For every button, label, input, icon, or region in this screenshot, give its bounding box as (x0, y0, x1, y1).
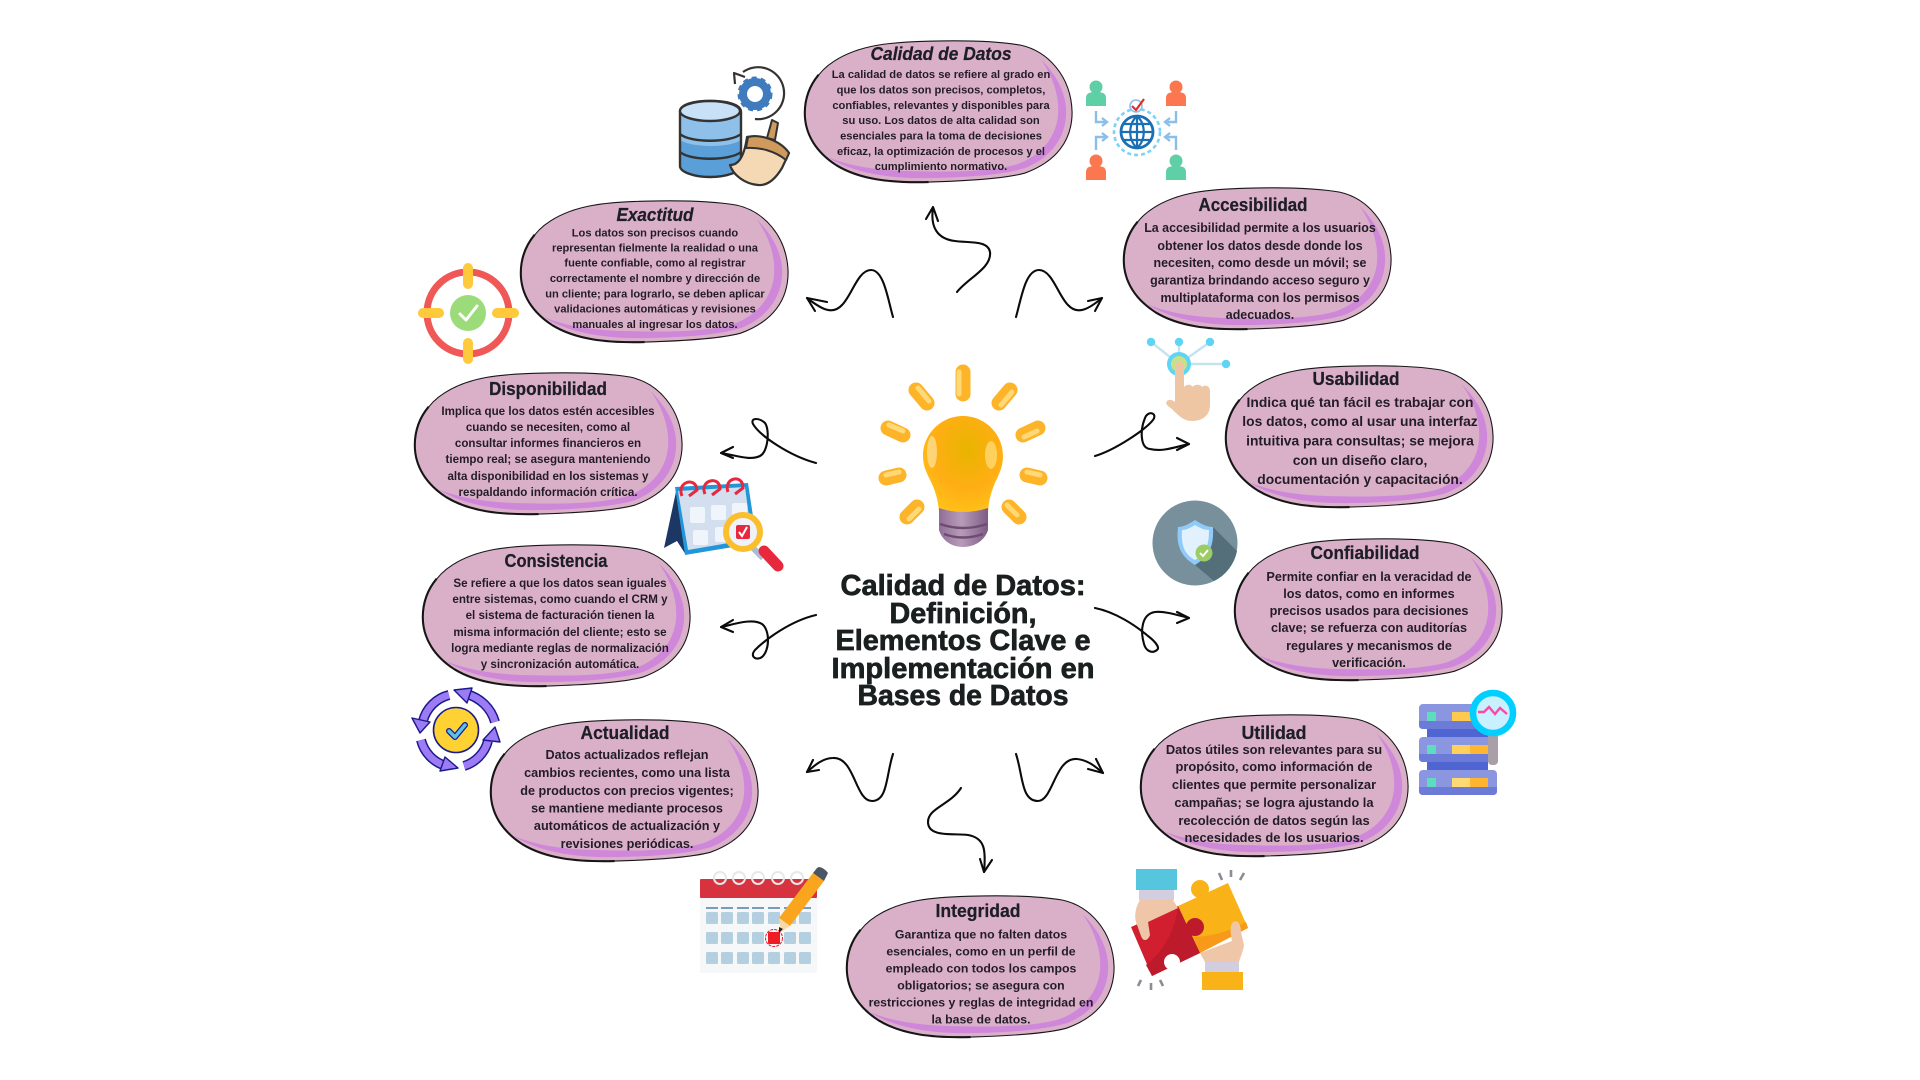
body: Usabilidad: con un diseño claro, (1293, 452, 1427, 468)
body: Exactitud: fuente confiable, como al registrar (564, 257, 746, 269)
body: Utilidad: necesidades de los usuarios. (1184, 830, 1364, 845)
body: Accesibilidad: garantiza brindando acceso seguro y (1150, 273, 1370, 287)
icon: security shield (1152, 500, 1238, 586)
arrow: to Actualidad (807, 754, 893, 801)
body: Calidad de Datos: esenciales para la toma de decisiones (840, 130, 1042, 142)
heading: Usabilidad: Usabilidad (1312, 369, 1400, 389)
body: Disponibilidad: alta disponibilidad en los sistemas y (447, 470, 649, 483)
bubble: Confiabilidad (1235, 539, 1502, 680)
body: Confiabilidad: Permite confiar en la veracidad de (1266, 570, 1472, 584)
bubble: Calidad de Datos (805, 41, 1072, 182)
body: Calidad de Datos: confiables, relevantes y disponibles para (832, 100, 1050, 112)
body: Calidad de Datos: que los datos son precisos, completos, (837, 84, 1045, 96)
title (832, 570, 1094, 712)
body: Confiabilidad: regulares y mecanismos de (1286, 639, 1452, 653)
title: Elementos Clave e (836, 625, 1090, 657)
body: Exactitud: manuales al ingresar los datos. (572, 319, 738, 331)
icon: database and brush (680, 67, 789, 185)
heading: Consistencia: Consistencia (504, 551, 608, 571)
bubble: Utilidad (1141, 715, 1408, 856)
body: Actualidad: revisiones periódicas. (561, 837, 693, 851)
body: Usabilidad: Indica qué tan fácil es trabajar con (1247, 394, 1473, 410)
body: Disponibilidad: Implica que los datos estén accesibles (441, 405, 655, 418)
bubble: Usabilidad (1226, 366, 1493, 507)
body: Consistencia: el sistema de facturación tienen la (466, 609, 655, 622)
body: Integridad: la base de datos. (931, 1012, 1031, 1026)
body: Consistencia: logra mediante reglas de normalización (451, 642, 669, 655)
body: Confiabilidad: clave; se refuerza con auditorías (1271, 621, 1467, 635)
body: Confiabilidad: los datos, como en informes (1283, 587, 1455, 601)
icon: globe with users (1086, 80, 1186, 180)
arrow: to Integridad (928, 788, 992, 872)
body: Disponibilidad: cuando se necesiten, como al (466, 421, 630, 434)
body: Confiabilidad: verificación. (1332, 656, 1406, 670)
title: Implementación en (832, 653, 1094, 685)
body: Calidad de Datos: eficaz, la optimización de procesos y el (837, 146, 1045, 158)
title: Calidad de Datos: (840, 570, 1086, 602)
arrow: to Confiabilidad (1095, 608, 1189, 652)
bubble: Disponibilidad (415, 373, 682, 514)
body: Utilidad: propósito, como información de (1176, 759, 1372, 774)
body: Integridad: restricciones y reglas de integridad en (869, 995, 1093, 1009)
body: Actualidad: de productos con precios vigentes; (520, 784, 734, 798)
body: Integridad: obligatorios; se asegura con (897, 978, 1065, 992)
icon: touch network (1147, 338, 1230, 421)
body: Utilidad: recolección de datos según las (1178, 813, 1370, 828)
body: Consistencia: entre sistemas, como cuando el CRM y (452, 593, 668, 606)
body: Integridad: empleado con todos los campos (886, 961, 1076, 975)
body: Exactitud: validaciones automáticas y revisiones (554, 303, 756, 315)
heading: Utilidad: Utilidad (1242, 723, 1306, 743)
bubble: Consistencia (423, 545, 690, 686)
body: Accesibilidad: obtener los datos desde donde los (1157, 239, 1363, 253)
body: Confiabilidad: precisos usados para decisiones (1270, 604, 1468, 618)
body: Actualidad: se mantiene mediante procesos (531, 801, 723, 815)
icon: refresh cycle with check (412, 688, 500, 771)
bubble: Actualidad (491, 720, 758, 861)
body: Calidad de Datos: La calidad de datos se refiere al grado en (832, 69, 1050, 81)
body: Usabilidad: documentación y capacitación. (1257, 471, 1463, 487)
body: Calidad de Datos: su uso. Los datos de alta calidad son (842, 115, 1040, 127)
body: Calidad de Datos: cumplimiento normativo. (875, 161, 1007, 173)
body: Usabilidad: intuitiva para consultas; se mejora (1246, 432, 1474, 448)
heading: Calidad de Datos: Calidad de Datos (870, 44, 1012, 64)
title: Definición, (890, 598, 1036, 630)
icon: light bulb (886, 372, 1040, 547)
body: Consistencia: Se refiere a que los datos sean iguales (453, 577, 667, 590)
heading: Confiabilidad: Confiabilidad (1310, 543, 1420, 563)
heading: Exactitud: Exactitud (616, 205, 694, 225)
arrow: to Utilidad (1016, 754, 1103, 801)
body: Actualidad: Datos actualizados reflejan (546, 748, 708, 762)
bubble: Accesibilidad (1124, 188, 1391, 329)
heading: Disponibilidad: Disponibilidad (489, 379, 607, 399)
body: Exactitud: representan fielmente la realidad o una (552, 242, 759, 254)
arrow: to Calidad de Datos (926, 207, 990, 292)
body: Utilidad: clientes que permite personalizar (1172, 777, 1376, 792)
body: Integridad: esenciales, como en un perfil de (886, 944, 1076, 958)
body: Consistencia: misma información del cliente; esto se (453, 626, 667, 639)
bubble: Exactitud (521, 201, 788, 342)
icon: puzzle hands (1131, 869, 1248, 990)
body: Disponibilidad: tiempo real; se asegura manteniendo (446, 453, 650, 466)
bubble: Integridad (847, 896, 1114, 1037)
arrow: to Exactitud (807, 270, 893, 317)
body: Consistencia: y sincronización automática. (481, 658, 639, 671)
heading: Integridad: Integridad (936, 901, 1020, 921)
icon: calendar with magnifier (664, 479, 778, 566)
body: Accesibilidad: necesiten, como desde un móvil; se (1154, 256, 1367, 270)
title: Bases de Datos (858, 680, 1068, 712)
body: Exactitud: un cliente; para lograrlo, se deben aplicar (545, 288, 765, 300)
arrow: to Disponibilidad (721, 419, 816, 463)
icon: calendar with pencil (700, 867, 828, 973)
body: Usabilidad: los datos, como al usar una interfaz (1242, 413, 1478, 429)
body: Accesibilidad: La accesibilidad permite a los usuarios (1144, 221, 1376, 235)
arrow: to Accesibilidad (1016, 270, 1102, 317)
heading: Actualidad: Actualidad (580, 723, 670, 743)
heading: Accesibilidad: Accesibilidad (1198, 195, 1308, 215)
arrow: to Usabilidad (1095, 413, 1189, 456)
arrow: to Consistencia (721, 615, 816, 659)
icon: target check (418, 263, 519, 364)
body: Accesibilidad: multiplataforma con los permisos (1160, 291, 1360, 305)
body: Actualidad: automáticos de actualización y (534, 819, 720, 833)
body: Accesibilidad: adecuados. (1226, 308, 1294, 322)
body: Actualidad: cambios recientes, como una lista (524, 766, 731, 780)
body: Exactitud: correctamente el nombre y dirección de (550, 273, 760, 285)
icon: server with magnifier (1419, 693, 1513, 795)
body: Integridad: Garantiza que no falten datos (895, 927, 1067, 941)
body: Utilidad: Datos útiles son relevantes para su (1166, 742, 1382, 757)
body: Exactitud: Los datos son precisos cuando (572, 227, 738, 239)
body: Disponibilidad: consultar informes financieros en (455, 437, 641, 450)
body: Disponibilidad: respaldando información crítica. (458, 486, 638, 499)
body: Utilidad: campañas; se logra ajustando la (1174, 795, 1374, 810)
